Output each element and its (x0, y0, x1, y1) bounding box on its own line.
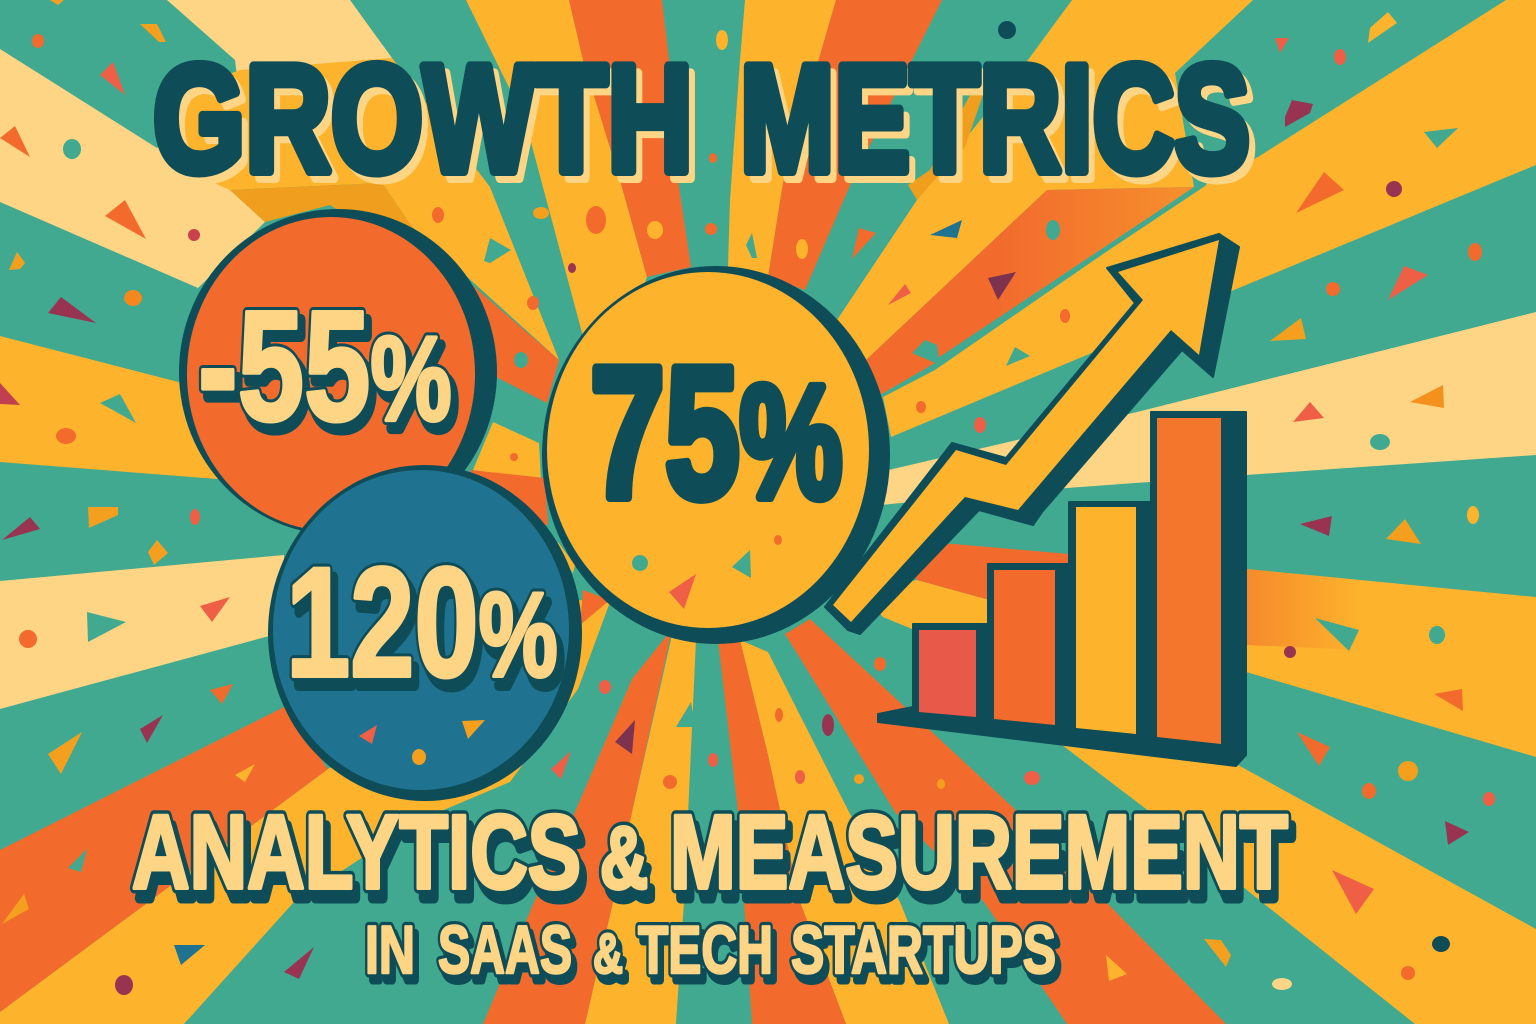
orange circle: -55%: -55% (203, 286, 457, 462)
heading: Analytics & Measurement: & (600, 808, 648, 907)
heading: Analytics & Measurement: ANALYTICS (132, 794, 581, 911)
bar 1 (919, 630, 976, 717)
blue circle: 120%: 120% (286, 536, 558, 710)
title: Growth Metrics: GROWTH (153, 34, 693, 204)
heading: Analytics & Measurement: & (605, 818, 653, 917)
subheading: In SaaS & Tech Startups: IN (369, 919, 419, 995)
heading: Analytics & Measurement: MEASUREMENT (670, 794, 1288, 911)
heading: Analytics & Measurement: MEASUREMENT (670, 794, 1288, 911)
heading: Analytics & Measurement: MEASUREMENT (675, 804, 1293, 921)
subheading: In SaaS & Tech Startups: STARTUPS (795, 919, 1060, 995)
orange circle: -55% (179, 209, 497, 535)
subheading: In SaaS & Tech Startups: SAAS (442, 919, 576, 995)
heading: Analytics & Measurement: ANALYTICS (132, 794, 581, 911)
orange circle: -55%: -55% (198, 278, 452, 454)
subheading: In SaaS & Tech Startups: IN (365, 912, 415, 988)
orange circle: -55%: -55% (198, 278, 452, 454)
heading: Analytics & Measurement (132, 794, 1293, 921)
subheading: In SaaS & Tech Startups: SAAS (438, 912, 572, 988)
confetti inside yellow circle (632, 535, 782, 609)
title: Growth Metrics: METRICS (740, 34, 1250, 204)
yellow circle: 75% (542, 266, 890, 644)
title: Growth Metrics: METRICS (746, 41, 1256, 211)
yellow circle: 75%: 75% (590, 328, 842, 537)
blue circle: 120%: 120% (286, 536, 558, 710)
subheading: In SaaS & Tech Startups: & (593, 922, 623, 986)
subheading: In SaaS & Tech Startups: IN (365, 912, 415, 988)
subheading: In SaaS & Tech Startups: & (593, 922, 623, 986)
title: Growth Metrics (153, 34, 1256, 211)
blue circle: 120% (268, 465, 582, 801)
growth arrow (825, 234, 1239, 634)
heading: Analytics & Measurement: ANALYTICS (137, 804, 586, 921)
bar chart (878, 412, 1246, 766)
title: Growth Metrics: GROWTH (159, 41, 699, 211)
subheading: In SaaS & Tech Startups: STARTUPS (791, 912, 1056, 988)
subheading: In SaaS & Tech Startups: TECH (642, 919, 777, 995)
subheading: In SaaS & Tech Startups: TECH (638, 912, 773, 988)
blue circle: 120%: 120% (291, 545, 563, 719)
bar 2 (994, 570, 1055, 725)
heading: Analytics & Measurement: & (600, 808, 648, 907)
subheading: In SaaS & Tech Startups: TECH (638, 912, 773, 988)
bar 4 (1157, 418, 1221, 744)
confetti inside blue circle (359, 720, 485, 765)
subheading: In SaaS & Tech Startups (365, 912, 1060, 995)
bar 3 (1076, 507, 1136, 734)
subheading: In SaaS & Tech Startups: SAAS (438, 912, 572, 988)
subheading: In SaaS & Tech Startups: STARTUPS (791, 912, 1056, 988)
subheading: In SaaS & Tech Startups: & (597, 929, 627, 993)
